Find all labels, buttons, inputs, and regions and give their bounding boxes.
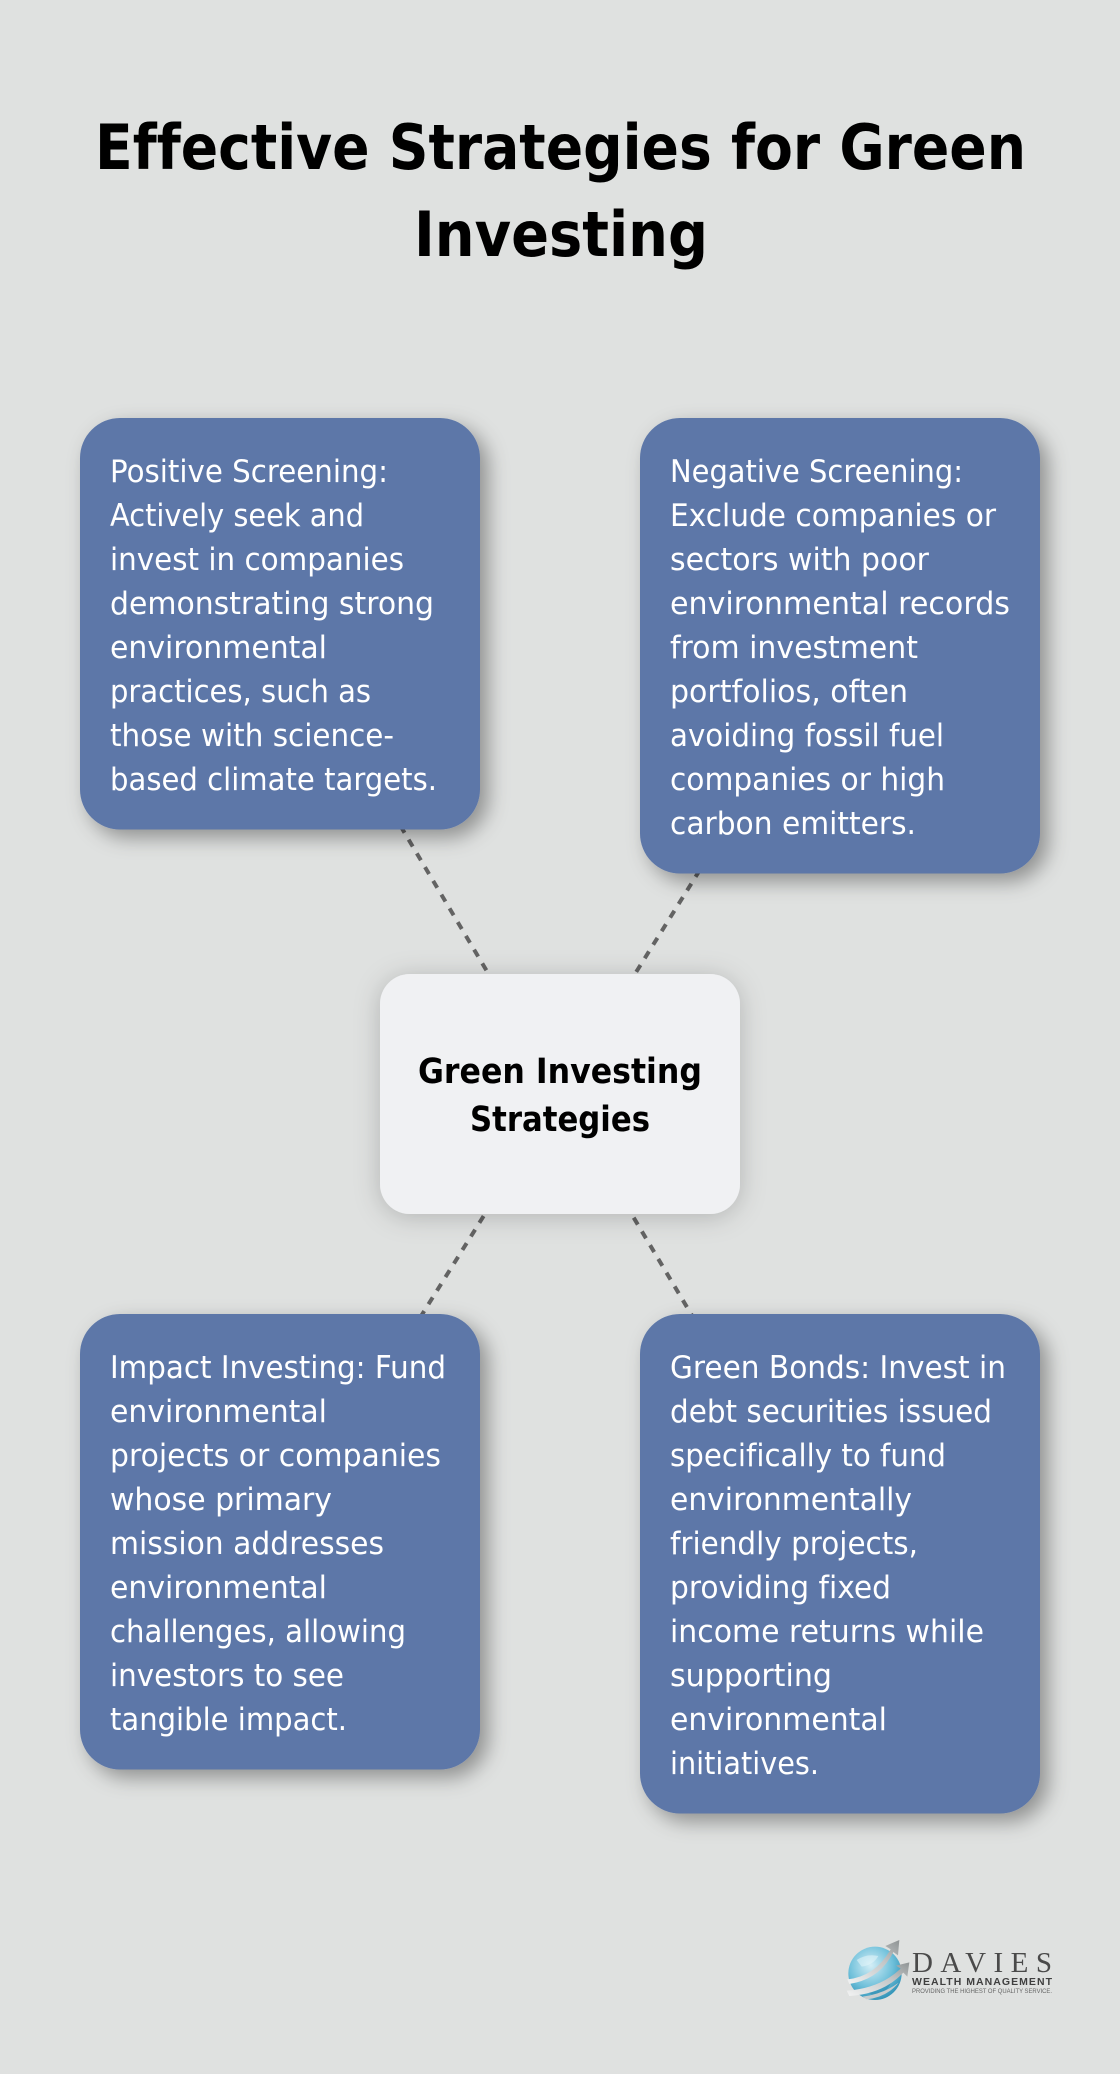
title: Effective Strategies for Green [95, 111, 1026, 184]
wordmark: DAVIES: DAVIES [912, 1947, 1052, 1979]
text: impact investing: whose primary [110, 1482, 332, 1518]
text: negative screening: carbon emitters. [670, 806, 916, 842]
text: positive screening: based climate targets. [110, 762, 437, 798]
connector: center to positive screening [280, 624, 560, 1094]
text: impact investing [110, 1350, 446, 1738]
text: green bonds: environmental [670, 1702, 887, 1738]
text: negative screening: Exclude companies or [670, 498, 996, 534]
text: negative screening: Negative Screening: [670, 454, 963, 490]
text: positive screening: demonstrating strong [110, 586, 434, 622]
text: green bonds [670, 1350, 1006, 1782]
text: center heading: Green Investing [418, 1052, 702, 1092]
text: negative screening: sectors with poor [670, 542, 929, 578]
logo: Davies Wealth Management [847, 1940, 1053, 2000]
text: green bonds: providing fixed [670, 1570, 891, 1606]
text: impact investing: Impact Investing: Fund [110, 1350, 446, 1386]
text: green bonds: environmentally [670, 1482, 912, 1518]
text: impact investing: investors to see [110, 1658, 344, 1694]
panel: positive screening [80, 418, 480, 830]
panel: impact investing [80, 1314, 480, 1770]
text: positive screening: environmental [110, 630, 327, 666]
text: green bonds: friendly projects, [670, 1526, 918, 1562]
text: positive screening: Actively seek and [110, 498, 364, 534]
text: negative screening: environmental records [670, 586, 1010, 622]
text: impact investing: challenges, allowing [110, 1614, 406, 1650]
text: green bonds: supporting [670, 1658, 832, 1694]
title [95, 111, 1026, 271]
text: negative screening: from investment [670, 630, 918, 666]
text: positive screening: those with science- [110, 718, 394, 754]
tagline: PROVIDING THE HIGHEST OF QUALITY SERVICE. [912, 1988, 1052, 1995]
text: positive screening: invest in companies [110, 542, 404, 578]
title: Investing [414, 198, 708, 271]
text: negative screening: portfolios, often [670, 674, 908, 710]
text: center heading [418, 1052, 702, 1140]
text: positive screening: Positive Screening: [110, 454, 388, 490]
text: center heading: Strategies [470, 1100, 650, 1140]
text: positive screening: practices, such as [110, 674, 371, 710]
text: impact investing: environmental [110, 1570, 327, 1606]
connector: center to impact investing [280, 1094, 560, 1542]
text: impact investing: environmental [110, 1394, 327, 1430]
wordmark: Wealth Management: WEALTH MANAGEMENT [912, 1976, 1053, 1988]
text: green bonds: debt securities issued [670, 1394, 992, 1430]
text: impact investing: tangible impact. [110, 1702, 347, 1738]
connector: center to negative screening [560, 646, 840, 1094]
connector: center to green bonds [560, 1094, 840, 1564]
panel: negative screening [640, 418, 1040, 874]
text: negative screening: avoiding fossil fuel [670, 718, 944, 754]
text: green bonds: Green Bonds: Invest in [670, 1350, 1006, 1386]
text: green bonds: initiatives. [670, 1746, 819, 1782]
text: green bonds: income returns while [670, 1614, 984, 1650]
text: green bonds: specifically to fund [670, 1438, 946, 1474]
text: impact investing: projects or companies [110, 1438, 441, 1474]
text: negative screening: companies or high [670, 762, 945, 798]
text: positive screening [110, 454, 437, 798]
text: impact investing: mission addresses [110, 1526, 384, 1562]
panel: green bonds [640, 1314, 1040, 1814]
text: negative screening [670, 454, 1010, 842]
center node: green investing strategies [380, 974, 740, 1214]
icon: globe with arrows [847, 1940, 909, 2000]
